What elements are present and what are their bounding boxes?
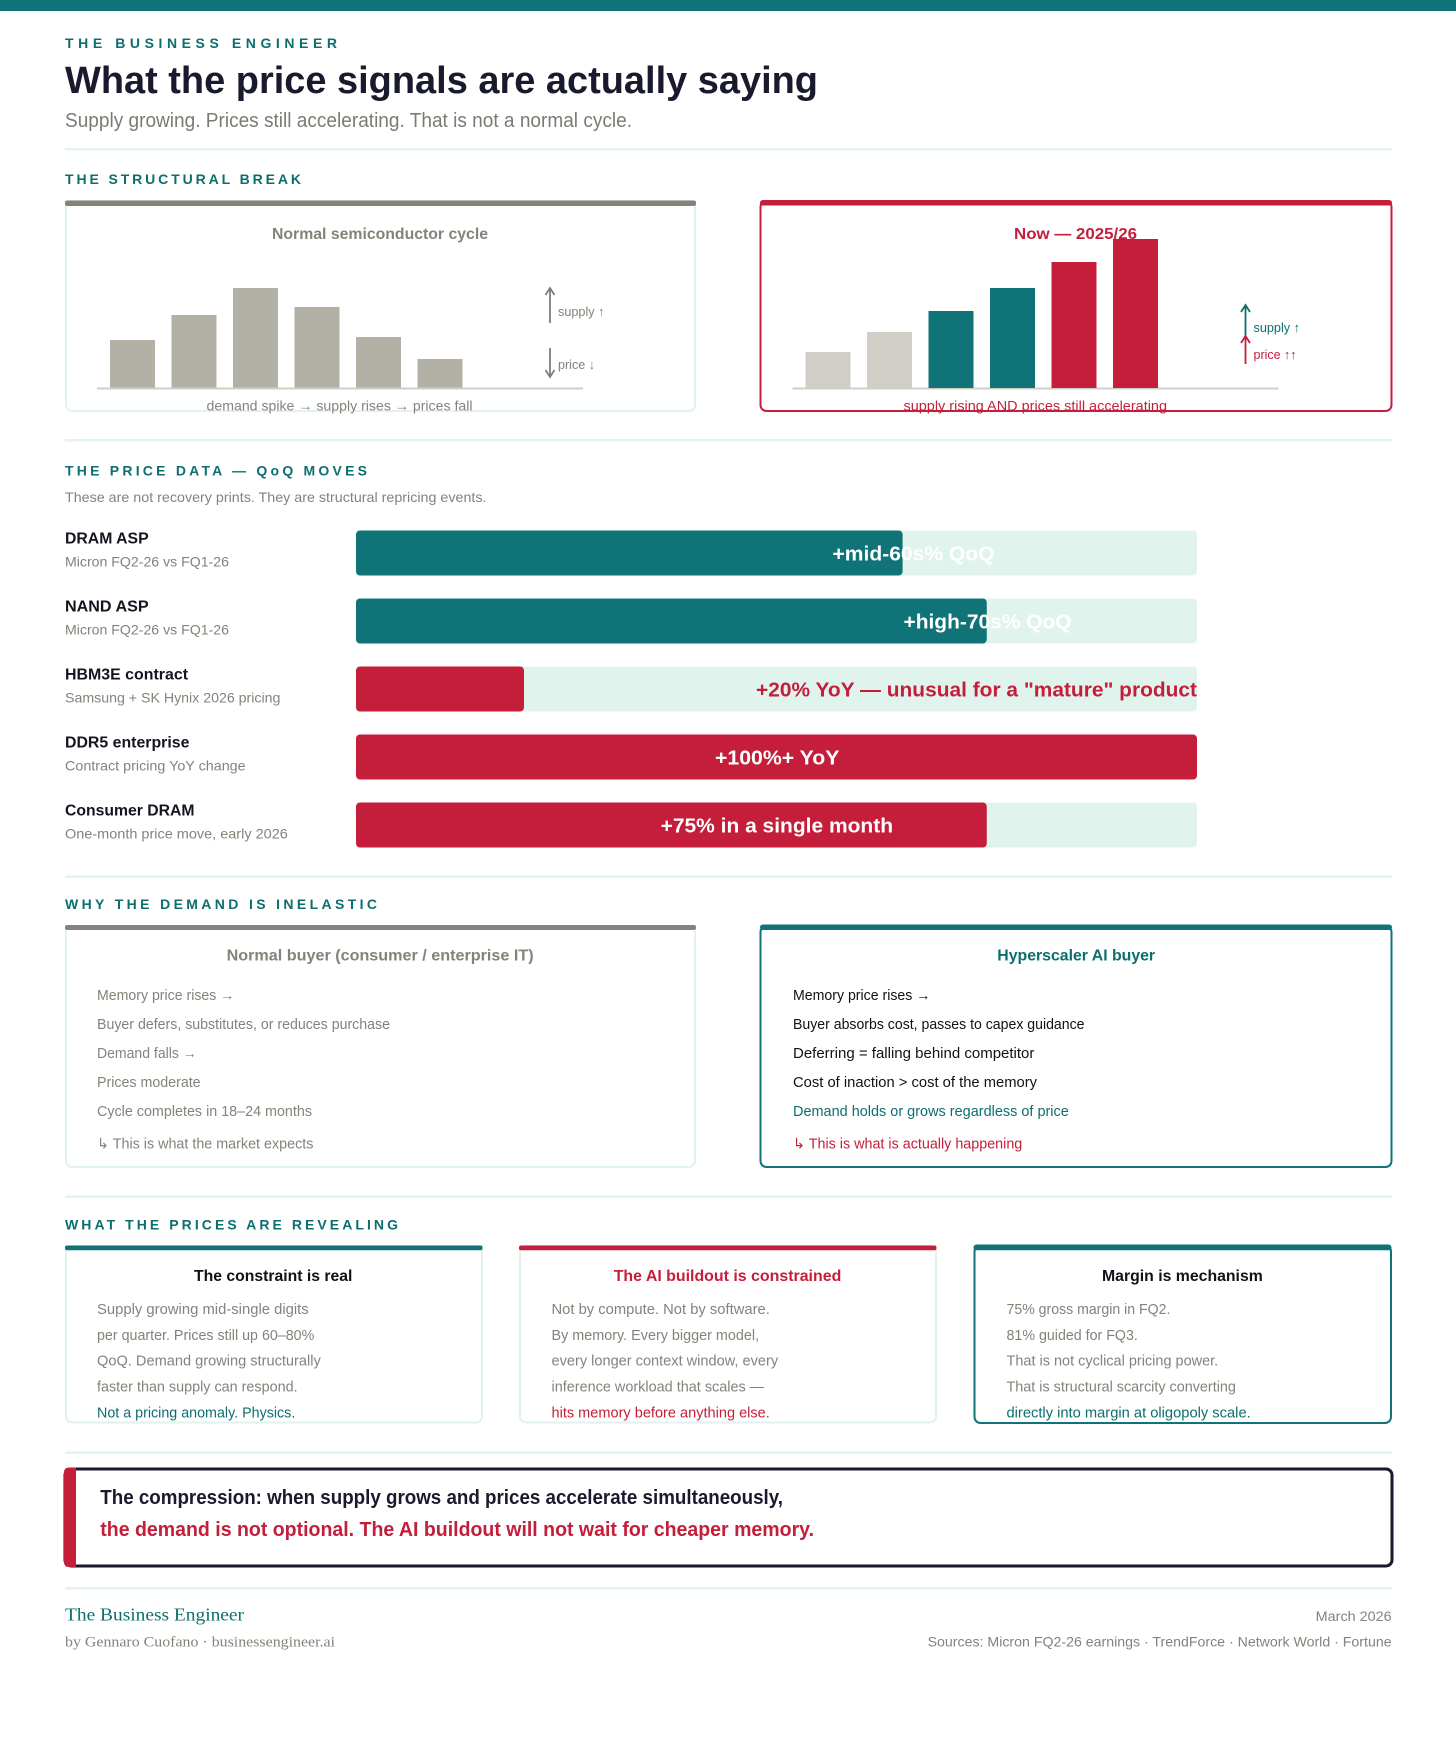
card body: hits memory before anything else. (552, 1405, 770, 1421)
buyer steps: Cost of inaction > cost of the memory (793, 1075, 1038, 1091)
buyer steps: Deferring = falling behind competitor (793, 1046, 1035, 1062)
section heading: the price data: THE PRICE DATA — QoQ MOVES (65, 462, 367, 478)
eyebrow: THE BUSINESS ENGINEER (65, 35, 337, 51)
panel title: Hyperscaler AI buyer (997, 948, 1155, 964)
card body: faster than supply can respond. (97, 1380, 298, 1396)
row: DRAM ASP: Micron FQ2-26 vs FQ1-26 (65, 554, 229, 570)
card title: Margin is mechanism (1102, 1268, 1263, 1285)
panel title: Normal buyer (consumer / enterprise IT) (227, 948, 534, 964)
row: NAND ASP: +high-70s% QoQ (904, 612, 1072, 634)
row: HBM3E contract: HBM3E contract (65, 666, 189, 683)
title: What the price signals are actually saying (65, 60, 818, 102)
bar chart: now (792, 239, 1278, 390)
card: the AI buildout is constrained (519, 1246, 936, 1422)
row: consumer DRAM: One-month price move, early 2026 (65, 826, 288, 842)
buyer steps: Prices moderate (97, 1075, 201, 1091)
card body: That is not cyclical pricing power. (1006, 1354, 1218, 1370)
subtitle: Supply growing. Prices still accelerating. That is not a normal cycle. (65, 110, 632, 132)
buyer steps: Memory price rises → (97, 988, 234, 1004)
card title: The AI buildout is constrained (614, 1268, 841, 1285)
callout line 1: The compression: when supply grows and prices accelerate simultaneously, (100, 1487, 783, 1509)
panel: hyperscaler AI buyer (760, 924, 1392, 1167)
card body: Supply growing mid-single digits (97, 1302, 309, 1318)
row: DDR5 enterprise: DDR5 enterprise (65, 734, 190, 751)
row: HBM3E contract (65, 666, 1197, 712)
row: DDR5 enterprise (65, 734, 1197, 780)
card body: That is structural scarcity converting (1006, 1380, 1236, 1396)
row: consumer DRAM: Consumer DRAM (65, 802, 194, 819)
row: consumer DRAM (65, 802, 1197, 848)
callout line 2: the demand is not optional. The AI buildout will not wait for cheaper memory. (100, 1519, 814, 1541)
section note: These are not recovery prints. They are structural repricing events. (65, 489, 487, 505)
buyer steps (793, 988, 1084, 1152)
card body: Not by compute. Not by software. (552, 1302, 770, 1318)
card: the constraint is real (65, 1246, 482, 1422)
section heading: the structural break: THE STRUCTURAL BREAK (65, 171, 301, 187)
buyer steps: Demand holds or grows regardless of price (793, 1104, 1069, 1120)
arrow: supply up (1241, 305, 1250, 336)
arrow: price up (1241, 336, 1250, 364)
buyer steps: Buyer absorbs cost, passes to capex guidance (793, 1017, 1084, 1033)
callout: the compression (64, 1468, 1392, 1567)
buyer steps: Cycle completes in 18–24 months (97, 1104, 312, 1120)
panel: normal semiconductor cycle (65, 200, 696, 414)
panel: now 2025/26 (760, 200, 1392, 414)
row: DRAM ASP: +mid-60s% QoQ (832, 544, 994, 566)
card body: inference workload that scales — (552, 1380, 765, 1396)
panel: normal buyer (65, 925, 696, 1167)
row: NAND ASP (65, 598, 1197, 644)
panel title: Normal semiconductor cycle (272, 226, 488, 243)
row: DRAM ASP (65, 530, 1197, 576)
card body: QoQ. Demand growing structurally (97, 1354, 322, 1370)
card title: The constraint is real (194, 1268, 352, 1285)
buyer steps: ↳ This is what is actually happening (793, 1136, 1022, 1152)
section heading: why the demand is inelastic: WHY THE DEMAND IS INELASTIC (65, 896, 377, 912)
arrow: supply up (546, 288, 554, 323)
caption: supply rising AND prices still accelerating (904, 398, 1167, 414)
label: price up: price ↑↑ (1254, 347, 1296, 362)
buyer steps: Demand falls → (97, 1046, 197, 1062)
footer date: March 2026 (1316, 1608, 1392, 1624)
row: DRAM ASP: DRAM ASP (65, 530, 149, 547)
card body: per quarter. Prices still up 60–80% (97, 1328, 314, 1344)
card body: By memory. Every bigger model, (552, 1328, 759, 1344)
label: supply up: supply ↑ (1254, 320, 1300, 335)
footer (65, 1605, 1392, 1651)
card body (552, 1302, 779, 1421)
section heading: what the prices are revealing: WHAT THE PRICES ARE REVEALING (65, 1216, 398, 1232)
buyer steps: Memory price rises → (793, 988, 930, 1004)
row: NAND ASP: NAND ASP (65, 598, 149, 615)
row: DDR5 enterprise: +100%+ YoY (715, 748, 840, 770)
row: DDR5 enterprise: Contract pricing YoY change (65, 758, 246, 774)
buyer steps: ↳ This is what the market expects (97, 1136, 313, 1152)
bar chart: normal cycle (97, 288, 583, 390)
card body (1006, 1302, 1251, 1421)
card body: 81% guided for FQ3. (1006, 1328, 1138, 1344)
row: HBM3E contract: Samsung + SK Hynix 2026 pricing (65, 690, 280, 706)
caption: demand spike → supply rises → prices fall (206, 398, 472, 414)
card body (97, 1302, 322, 1421)
card: margin is mechanism (974, 1244, 1392, 1423)
row: consumer DRAM: +75% in a single month (661, 816, 893, 838)
arrow: price down (546, 348, 554, 377)
buyer steps: Buyer defers, substitutes, or reduces purchase (97, 1017, 390, 1033)
label: supply up: supply ↑ (558, 304, 604, 319)
panel title: Now — 2025/26 (1014, 226, 1137, 243)
footer byline: by Gennaro Cuofano · businessengineer.ai (65, 1635, 335, 1651)
label: price down: price ↓ (558, 357, 595, 372)
card body: directly into margin at oligopoly scale. (1006, 1405, 1251, 1421)
footer brand: The Business Engineer (65, 1605, 244, 1625)
card body: 75% gross margin in FQ2. (1006, 1302, 1170, 1318)
row: HBM3E contract: +20% YoY — unusual for a "mature" product (756, 680, 1197, 702)
header (65, 35, 818, 132)
buyer steps (97, 988, 390, 1152)
card body: Not a pricing anomaly. Physics. (97, 1405, 295, 1421)
card body: every longer context window, every (552, 1354, 779, 1370)
row: NAND ASP: Micron FQ2-26 vs FQ1-26 (65, 622, 229, 638)
footer sources: Sources: Micron FQ2-26 earnings · TrendForce · Network World · Fortune (928, 1634, 1392, 1650)
